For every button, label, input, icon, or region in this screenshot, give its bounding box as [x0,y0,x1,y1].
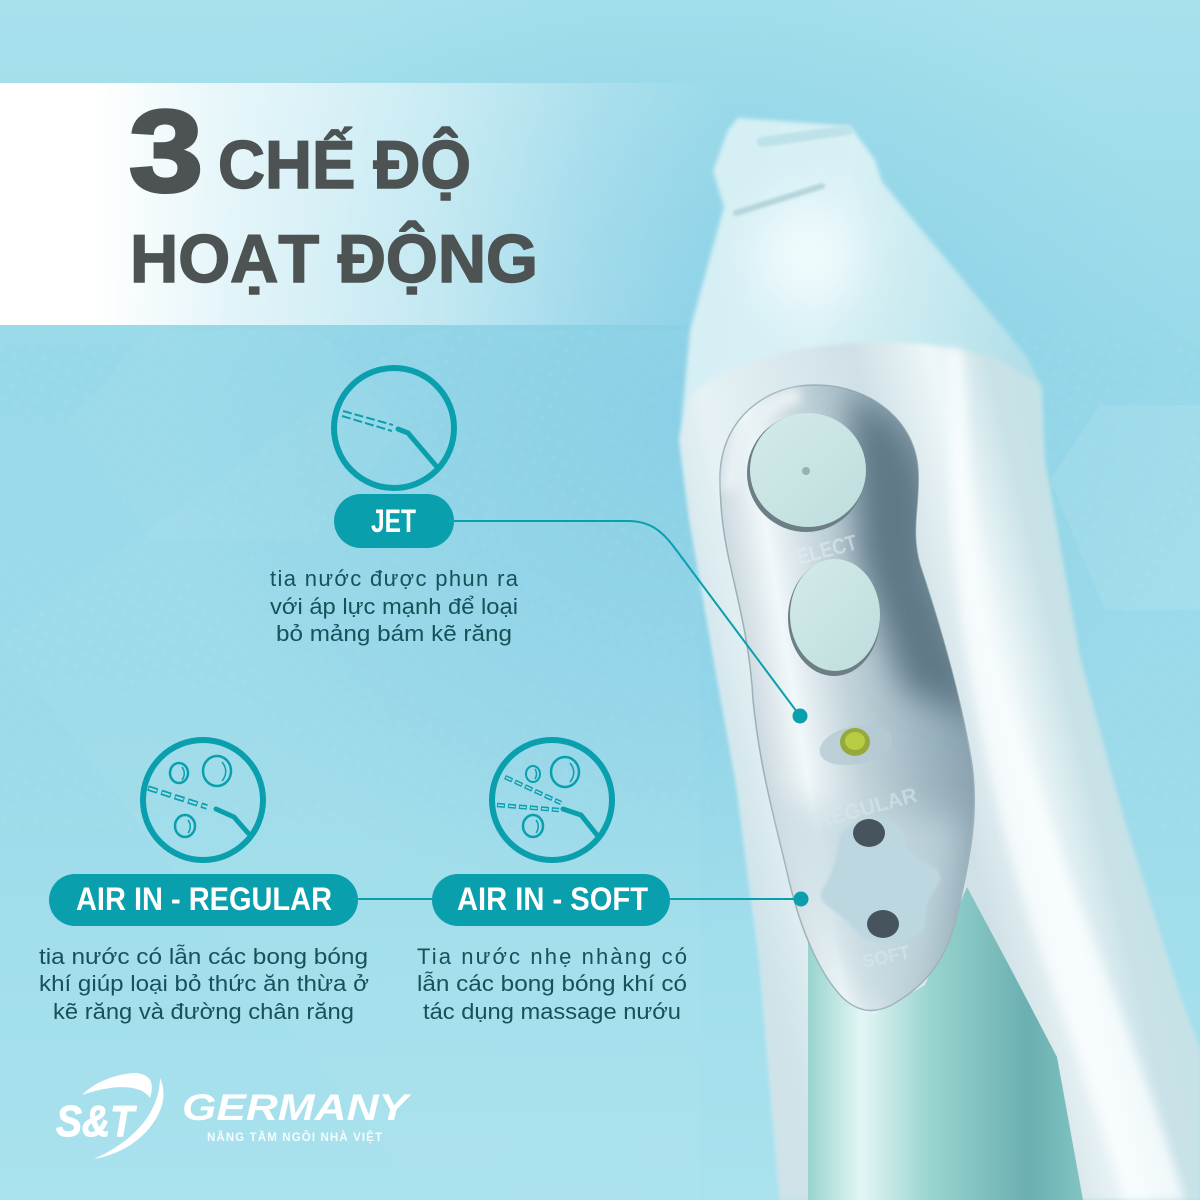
description: jet: bỏ mảng bám kẽ răng [276,621,512,646]
nozzle ridge [736,186,822,213]
green indicator light [816,719,896,771]
connector dot: jet [792,708,808,724]
label: soft: AIR IN - SOFT [457,881,648,917]
label: regular: REGULAR [813,784,920,833]
indicator: soft [867,910,899,938]
description: regular: tia nước có lẫn các bong bóng [39,944,368,969]
connector lines [358,521,800,899]
description: soft: tác dụng massage nướu [423,999,681,1024]
main body [680,342,1200,1200]
label: soft: SOFT [861,942,912,973]
title line 1: CHẾ ĐỘ [218,126,471,203]
description: regular: khí giúp loại bỏ thức ăn thừa ở [39,971,369,996]
mode: jet [270,368,519,646]
icon: jet stream [334,368,454,488]
button: select [788,559,880,676]
description: jet: với áp lực mạnh để loại [270,594,518,619]
green lower section [808,887,1083,1200]
body highlight [945,350,1185,1200]
icon: soft stream with bubbles [492,740,612,860]
logo swoosh [82,1073,164,1159]
label: regular: AIR IN - REGULAR [76,881,332,917]
title [129,86,538,297]
icon: regular stream with bubbles [143,740,263,860]
description: soft: lẫn các bong bóng khí có [417,971,687,996]
silver control panel [720,385,985,1010]
mode: air in regular [39,740,369,1024]
pill: soft [432,874,670,926]
logo: S&T Germany [56,1073,412,1159]
label: jet: JET [371,503,416,539]
nozzle top collar [762,130,848,142]
pill: regular [49,874,358,926]
indicator: regular [853,819,885,847]
logo mark: S&T [56,1097,137,1146]
description: jet: tia nước được phun ra [270,566,519,591]
title numeral: 3 [129,86,203,216]
label: select: SELECT [782,529,860,573]
logo wordmark: GERMANY [182,1087,412,1128]
product: water flosser handle [680,118,1200,1200]
description: regular: kẽ răng và đường chân răng [53,999,354,1024]
description: soft: Tia nước nhẹ nhàng có [417,944,687,969]
nozzle highlight [758,200,858,310]
button: power [747,413,866,532]
title band [0,83,730,325]
logo tagline: NÂNG TẦM NGÔI NHÀ VIỆT [207,1131,382,1144]
connector: jet [454,521,800,716]
connector: air in [358,898,800,900]
description: soft [417,944,687,1024]
description: jet [270,566,519,646]
nozzle and translucent shell [680,118,1200,1200]
description: regular [39,944,369,1024]
indicator halo [821,819,940,943]
pill: jet [334,494,454,548]
mode: air in soft [417,740,687,1024]
title line 2: HOẠT ĐỘNG [130,220,538,297]
connector dot: air in [794,892,808,906]
